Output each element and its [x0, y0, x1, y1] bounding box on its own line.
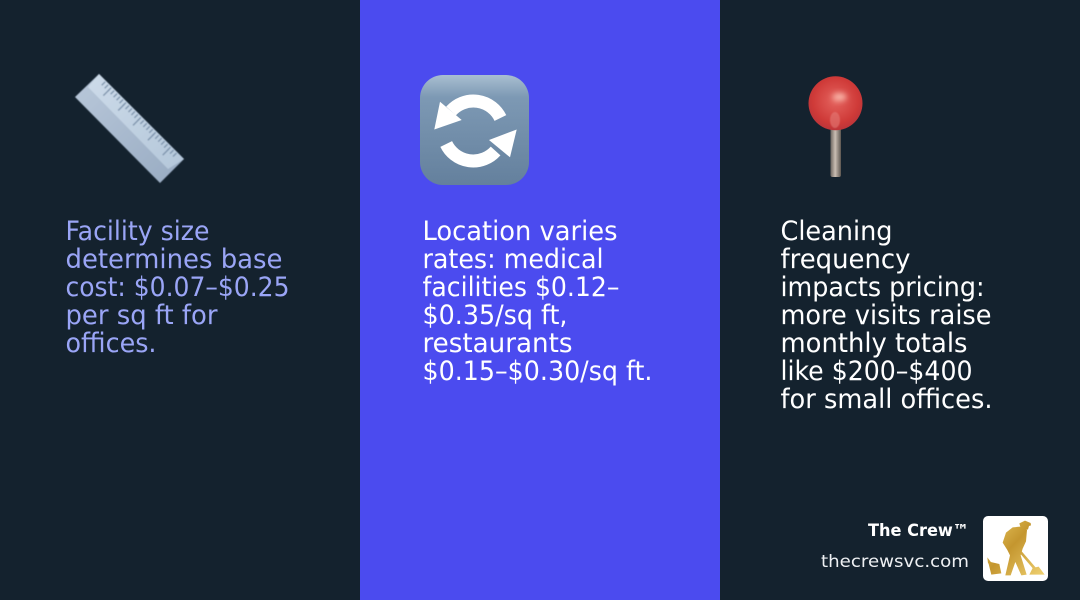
text: location: restaurants — [422, 328, 572, 359]
text: facility size: offices. — [66, 328, 156, 359]
text: frequency: Cleaning — [780, 216, 892, 247]
text: location: facilities $0.12– — [422, 272, 620, 303]
text: frequency — [780, 216, 992, 415]
text: frequency: monthly totals — [780, 328, 968, 359]
logo — [983, 516, 1048, 581]
text: facility size — [66, 216, 290, 359]
text: frequency: like $200–$400 — [780, 356, 972, 387]
text: facility size: Facility size — [66, 216, 210, 247]
text: facility size: per sq ft for — [66, 300, 218, 331]
footer brand — [821, 516, 1048, 581]
text: frequency: frequency — [780, 244, 910, 275]
panel: facility size — [0, 0, 360, 600]
text: location: rates: medical — [422, 244, 604, 275]
brand name: The Crew™ — [868, 521, 969, 540]
text: location: $0.35/sq ft, — [422, 300, 568, 331]
panel: location — [360, 0, 720, 600]
icon: sync arrows — [420, 75, 529, 185]
website: thecrewsvc.com — [821, 552, 969, 572]
text: facility size: cost: $0.07–$0.25 — [66, 272, 290, 303]
text: location: Location varies — [422, 216, 618, 247]
text: location — [422, 216, 652, 387]
text: facility size: determines base — [66, 244, 282, 275]
text: frequency: impacts pricing: — [780, 272, 984, 303]
icon: ruler — [75, 74, 184, 183]
icon: round pushpin — [808, 76, 862, 177]
text: frequency: for small offices. — [780, 384, 992, 415]
panel: frequency — [720, 0, 1080, 600]
text: frequency: more visits raise — [780, 300, 992, 331]
text: location: $0.15–$0.30/sq ft. — [422, 356, 652, 387]
